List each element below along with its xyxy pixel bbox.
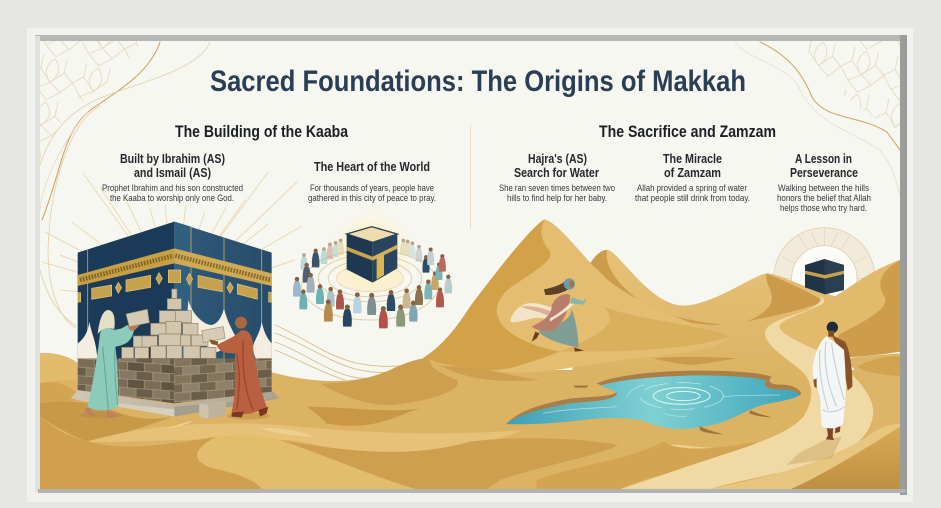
loose block	[199, 401, 226, 419]
column: A Lesson in Perseverance	[777, 151, 871, 213]
bank	[506, 371, 801, 424]
front-right shaded dune	[280, 438, 618, 489]
column: Built by Ibrahim: and Ismail (AS)	[134, 165, 211, 180]
plinth	[71, 390, 279, 417]
divider between sections	[470, 125, 472, 228]
column: The Heart of the World	[308, 159, 436, 203]
figure: Hajra running	[511, 278, 586, 352]
corner ornament: top right geometric lattice	[800, 41, 900, 130]
back dune	[40, 353, 490, 493]
section heading: The Building of the Kaaba	[175, 123, 349, 141]
flowing gold lines	[40, 42, 900, 380]
big dune	[423, 219, 696, 372]
medallion behind distant Kaaba	[774, 227, 875, 282]
figure: Ibrahim	[80, 309, 149, 418]
gold plaques	[78, 270, 272, 302]
pilgrims	[293, 247, 452, 328]
stone stack	[122, 289, 216, 358]
section heading: The Sacrifice and Zamzam	[599, 123, 776, 141]
Kaaba glow and pilgrims circle	[293, 203, 452, 328]
column: Built by Ibrahim: Prophet Ibrahim and his son constructed	[102, 183, 243, 193]
right dunes	[710, 260, 900, 489]
column: Miracle of Zamzam: Allah provided a spring of water	[637, 183, 747, 193]
small Kaaba	[347, 227, 397, 283]
light stripe	[87, 423, 523, 454]
column: Hajra's search: She ran seven times between two	[499, 183, 615, 193]
sun rays behind Kaaba	[42, 172, 302, 300]
gold band	[78, 248, 174, 286]
column: A Lesson in Perseverance: Walking between the hills	[778, 183, 869, 193]
water	[506, 375, 800, 429]
shaded ground	[40, 401, 173, 442]
distant Kaaba	[805, 259, 844, 294]
highlights	[260, 428, 313, 437]
column: Miracle of Zamzam: that people still drink from today.	[635, 193, 750, 203]
front-left dune	[40, 417, 262, 489]
Zamzam water pool	[506, 371, 801, 434]
left sand	[40, 353, 618, 493]
column: Built by Ibrahim: the Kaaba to worship only one God.	[110, 193, 234, 203]
column: The Heart of the World: For thousands of years, people have	[310, 183, 434, 193]
corner ornament: top left geometric lattice	[40, 41, 142, 165]
title: Sacred Foundations: The Origins of Makkah	[210, 65, 746, 98]
column: A Lesson in Perseverance: helps those who try hard.	[780, 203, 867, 213]
cracks	[573, 386, 772, 434]
column: Built by Ibrahim	[102, 151, 243, 203]
concentric rings	[302, 250, 438, 320]
dune left face	[423, 219, 560, 370]
glow	[334, 216, 409, 280]
white curtains	[78, 300, 272, 361]
figure: pilgrim walking	[787, 322, 852, 465]
figure: Ismail	[202, 317, 270, 419]
column: Miracle of Zamzam: of Zamzam	[664, 165, 721, 180]
dune shadow	[560, 307, 730, 352]
main dunes right	[423, 219, 757, 489]
Kaaba under construction	[71, 222, 279, 419]
distant dunes	[572, 250, 836, 370]
faded rear pilgrims	[301, 239, 422, 270]
winding path	[620, 296, 873, 489]
column: A Lesson in Perseverance: A Lesson in	[795, 151, 852, 166]
column: The Heart of the World: gathered in this city of peace to pray.	[308, 193, 436, 203]
column: The Heart of the World: The Heart of the World	[314, 159, 430, 174]
column: Hajra's search: Search for Water	[514, 165, 599, 180]
section: The Sacrifice and Zamzam	[499, 123, 871, 213]
sand base	[470, 370, 900, 489]
column: A Lesson in Perseverance: honors the belief that Allah	[777, 193, 871, 203]
column: Hajra's search: hills to find help for her baby.	[507, 193, 607, 203]
ripples	[543, 383, 780, 416]
column: Miracle of Zamzam: The Miracle	[663, 151, 722, 166]
kiswah faces	[78, 222, 174, 360]
column: Hajra's search	[499, 151, 615, 203]
column: Hajra's search: Hajra's (AS)	[528, 151, 587, 166]
column: Built by Ibrahim: Built by Ibrahim (AS)	[120, 151, 225, 166]
section: The Building of the Kaaba	[102, 123, 436, 203]
column: Miracle of Zamzam	[635, 151, 750, 203]
shadow near pond	[653, 357, 737, 365]
brick wall	[78, 358, 174, 403]
column: A Lesson in Perseverance: Perseverance	[790, 165, 858, 180]
desert landscape scene	[40, 203, 900, 493]
